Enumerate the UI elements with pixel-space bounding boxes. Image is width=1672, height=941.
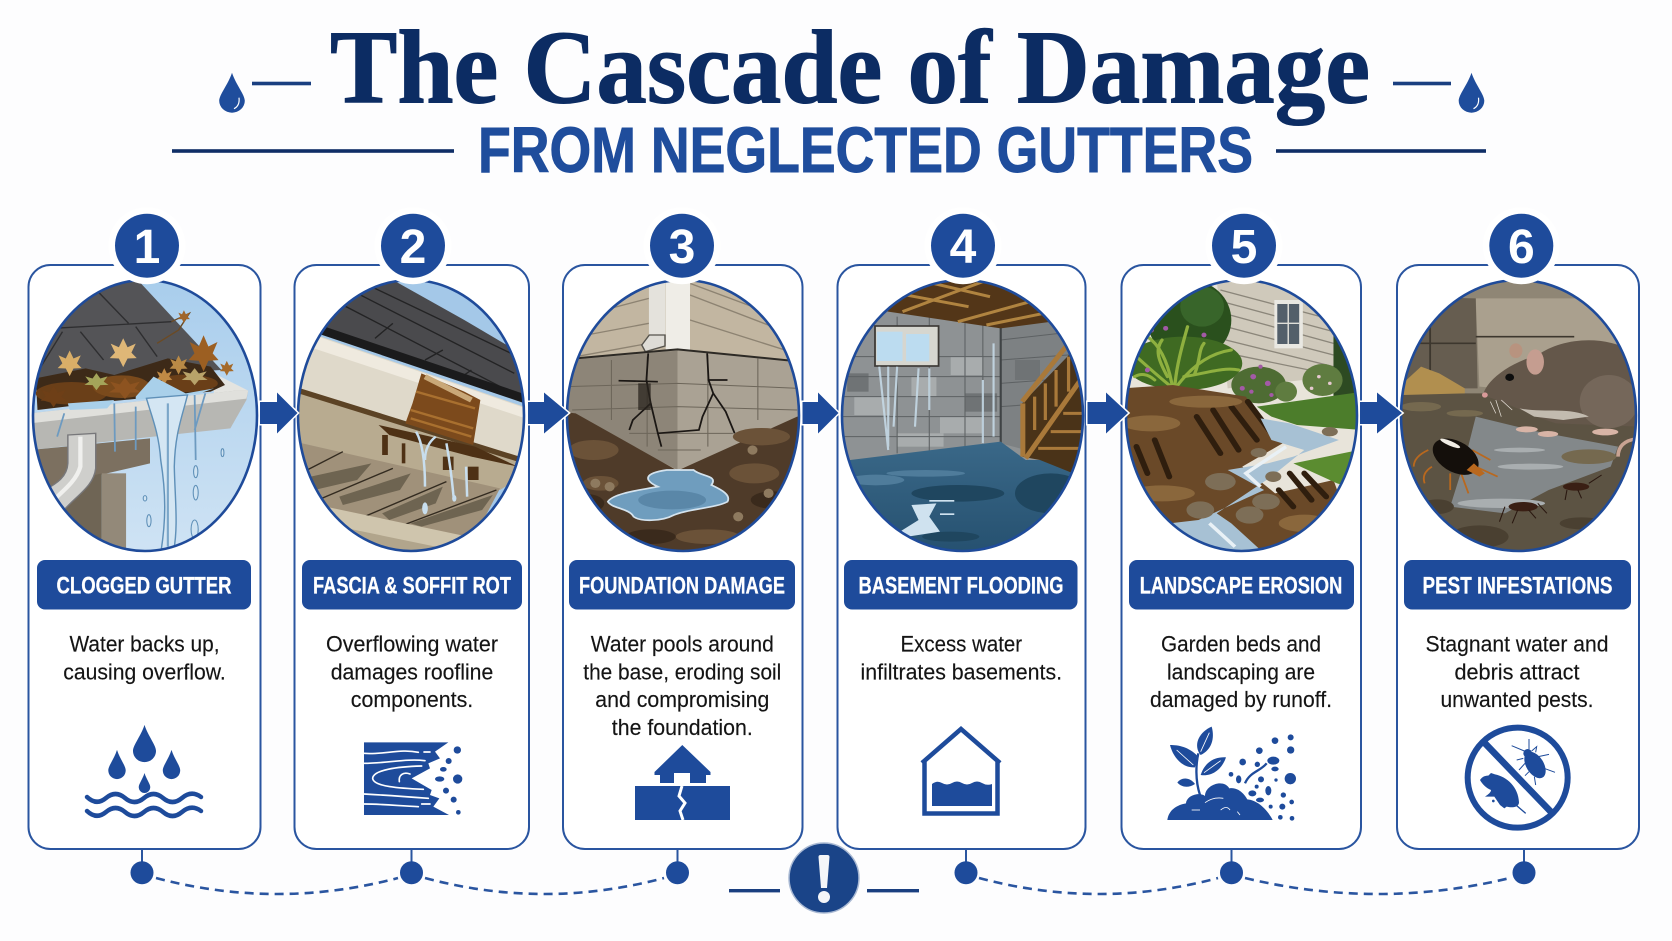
- arrow: step 3 to 4: [802, 392, 838, 434]
- heading: [844, 560, 1078, 610]
- step number: [931, 214, 995, 278]
- panel: step 6 pest infestations: [1395, 207, 1644, 849]
- description: Overflowing water: [326, 632, 498, 656]
- scene: cracked foundation and pooled water: [561, 277, 804, 557]
- description: Stagnant water and: [1426, 632, 1608, 656]
- panel: step 3 foundation damage: [561, 207, 804, 849]
- icon: drops over water waves: [87, 725, 201, 816]
- heading: FOUNDATION DAMAGE: [579, 572, 785, 600]
- description: Water pools around: [591, 632, 774, 656]
- icon: flooded house: [922, 729, 1000, 814]
- oval frame: [298, 280, 524, 551]
- subtitle: FROM NEGLECTED GUTTERS: [478, 114, 1253, 186]
- step number: 2: [400, 221, 426, 274]
- alert badge: [789, 843, 859, 913]
- description: [1150, 632, 1332, 712]
- description: the base, eroding soil: [583, 660, 781, 684]
- icon: left water drop: [219, 73, 245, 113]
- arrow: step 2 to 3: [528, 392, 568, 434]
- description: [861, 632, 1062, 684]
- description: landscaping are: [1167, 660, 1315, 684]
- heading: CLOGGED GUTTER: [56, 572, 232, 600]
- bottom connector timeline: [130, 849, 1536, 894]
- description: [326, 632, 498, 712]
- step number: [115, 214, 179, 278]
- description: and compromising: [595, 687, 769, 712]
- step number: [650, 214, 714, 278]
- heading: [1404, 560, 1631, 610]
- description: components.: [351, 687, 473, 712]
- icon: house on cracked foundation: [635, 745, 730, 820]
- oval frame: [842, 280, 1083, 551]
- scene: eroded garden with stream: [1122, 277, 1363, 557]
- oval frame: [1126, 280, 1357, 551]
- icon: no pests sign: [1468, 728, 1568, 828]
- step number: 5: [1231, 221, 1257, 274]
- header: [172, 8, 1486, 186]
- icon: crumbling wood: [364, 742, 462, 815]
- heading: [302, 560, 522, 610]
- arrow: step 5 to 6: [1360, 392, 1402, 434]
- arrow: step 4 to 5: [1088, 392, 1128, 434]
- panel: step 4 basement flooding: [836, 207, 1090, 849]
- description: infiltrates basements.: [861, 660, 1062, 684]
- icon: plant and eroding soil: [1167, 727, 1296, 821]
- title: The Cascade of Damage: [330, 8, 1370, 126]
- step number: 4: [950, 221, 977, 274]
- description: [583, 632, 781, 740]
- description: Garden beds and: [1161, 632, 1321, 656]
- scene: flooded basement: [836, 277, 1090, 557]
- description: the foundation.: [612, 715, 753, 740]
- heading: [37, 560, 251, 610]
- panel: step 5 landscape erosion: [1122, 207, 1363, 849]
- description: [1426, 632, 1608, 712]
- description: causing overflow.: [63, 660, 226, 684]
- scene: rat and insects in stagnant water: [1395, 277, 1644, 557]
- step number: 3: [669, 221, 695, 274]
- icon: right water drop: [1459, 73, 1484, 113]
- description: Water backs up,: [70, 632, 220, 656]
- heading: PEST INFESTATIONS: [1422, 572, 1612, 600]
- oval frame: [1401, 280, 1636, 551]
- heading: LANDSCAPE EROSION: [1140, 572, 1342, 600]
- step number: 6: [1508, 221, 1535, 274]
- heading: [1129, 560, 1354, 610]
- scene: clogged gutter with overflowing water: [29, 277, 264, 553]
- description: Excess water: [901, 632, 1023, 656]
- description: [63, 632, 226, 684]
- description: unwanted pests.: [1440, 687, 1594, 712]
- step number: [381, 214, 445, 278]
- oval frame: [567, 280, 799, 551]
- description: damaged by runoff.: [1150, 687, 1332, 712]
- description: debris attract: [1454, 660, 1580, 684]
- heading: BASEMENT FLOODING: [858, 572, 1064, 600]
- step number: [1212, 214, 1276, 278]
- oval frame: [33, 280, 257, 551]
- heading: [569, 560, 795, 610]
- heading: FASCIA & SOFFIT ROT: [313, 572, 511, 600]
- arrow: step 1 to 2: [260, 392, 298, 434]
- panel: step 1 clogged gutter: [28, 207, 264, 849]
- step number: [1489, 214, 1553, 278]
- step number: 1: [134, 221, 160, 274]
- panel: step 2 fascia and soffit rot: [293, 207, 532, 849]
- description: damages roofline: [331, 660, 493, 684]
- scene: rotted fascia board under roof: [299, 282, 523, 550]
